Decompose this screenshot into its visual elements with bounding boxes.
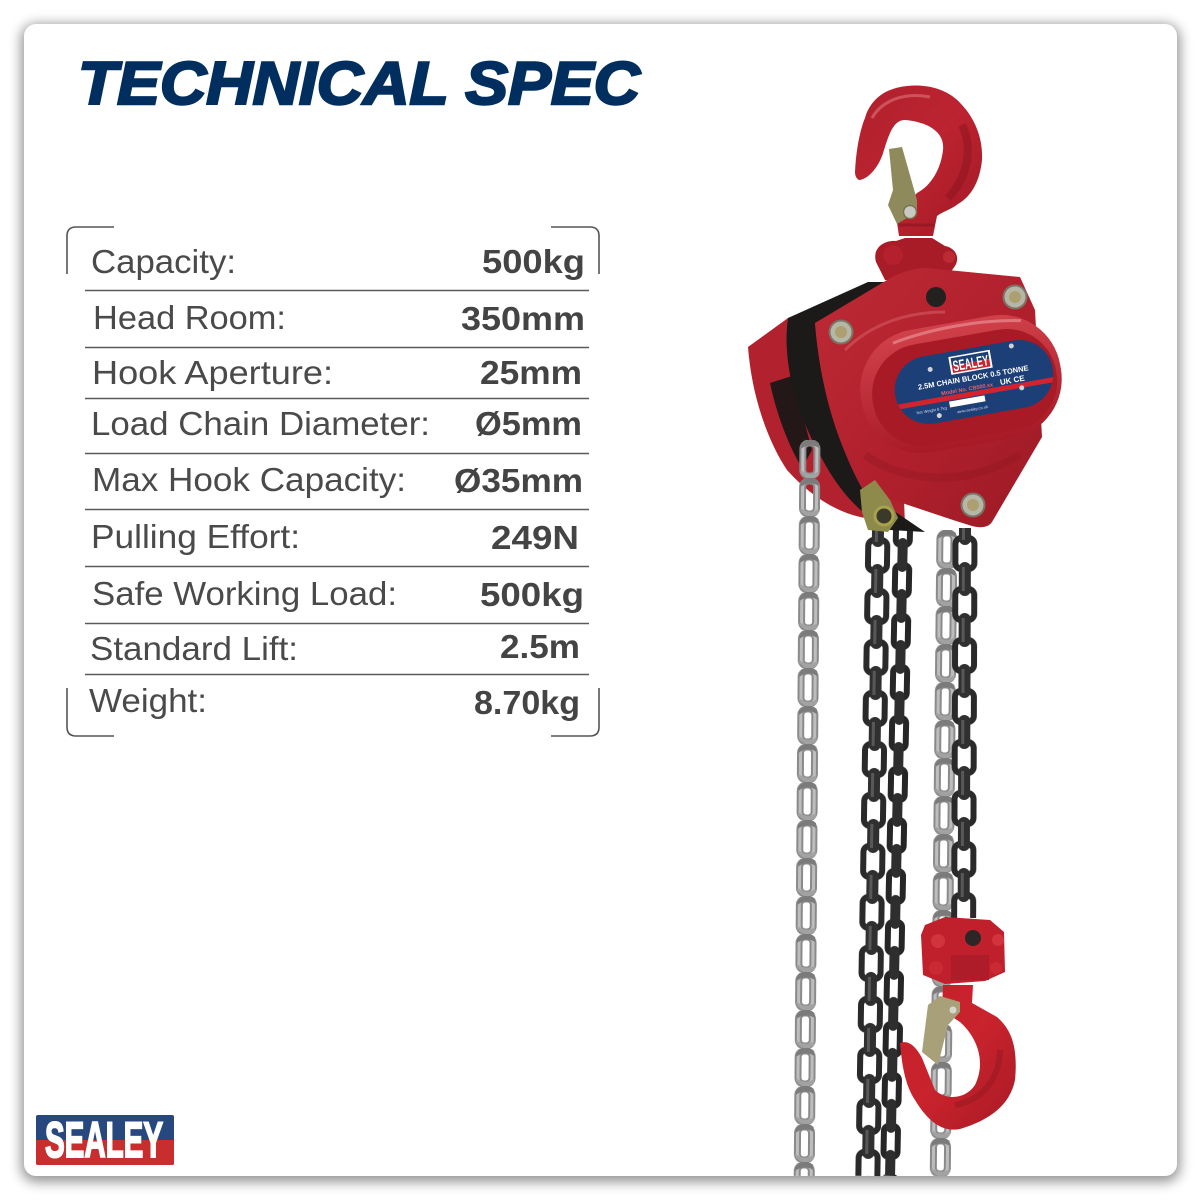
spec labels	[89, 243, 430, 719]
product label plate: Model No. CB500.xx	[941, 382, 995, 397]
panel: specification table	[67, 227, 599, 736]
spec values: 2.5m	[500, 628, 580, 665]
upper hook safety latch	[888, 147, 917, 224]
upper hook	[855, 86, 982, 236]
spec values: 25mm	[480, 354, 582, 391]
table row dividers	[85, 290, 589, 674]
product label plate: UK CE	[999, 374, 1026, 387]
spec values: 249N	[491, 519, 579, 556]
lower hook	[900, 985, 1016, 1130]
spec values: Ø5mm	[475, 405, 582, 442]
spec values: 350mm	[461, 300, 585, 337]
spec labels: Pulling Effort:	[91, 518, 300, 555]
product illustration: chain block hoist	[748, 86, 1071, 1176]
product label plate: SEALEY	[952, 352, 990, 375]
spec labels: Capacity:	[91, 243, 236, 280]
spec values	[454, 243, 585, 721]
title: TECHNICAL SPEC	[78, 50, 642, 117]
lower hook block	[921, 917, 1005, 984]
front housing plate	[815, 268, 1042, 527]
spec values: 500kg	[480, 576, 584, 613]
rear housing plate	[748, 283, 905, 525]
spec labels: Safe Working Load:	[92, 575, 397, 612]
black centre housing	[787, 282, 925, 532]
spec labels: Head Room:	[93, 299, 286, 336]
spec labels: Max Hook Capacity:	[92, 461, 406, 498]
spec labels: Weight:	[89, 682, 207, 719]
table corner brackets	[67, 227, 599, 736]
product label plate: 2.5M CHAIN BLOCK 0.5 TONNE	[917, 363, 1029, 392]
black load chains	[854, 528, 979, 1176]
spec values: Ø35mm	[454, 462, 583, 499]
lower hook safety latch	[922, 996, 960, 1065]
back silver hand chain	[928, 530, 959, 1176]
spec labels: Load Chain Diameter:	[91, 405, 430, 442]
swivel head	[875, 238, 957, 280]
Sealey logo: SEALEY	[45, 1112, 163, 1168]
product label plate: www.sealey.co.uk	[957, 404, 988, 414]
front silver hand chain	[791, 440, 823, 1176]
product label plate: Net Weight 8.7kg	[916, 405, 947, 415]
product label plate	[894, 340, 1054, 424]
spec values: 8.70kg	[474, 684, 580, 721]
spec labels: Standard Lift:	[90, 630, 298, 667]
spec values: 500kg	[482, 243, 585, 280]
Sealey logo	[36, 1112, 174, 1168]
oval raised cover	[851, 305, 1071, 463]
bolts	[830, 286, 1026, 516]
lower chain guide pin	[860, 480, 898, 532]
spec labels: Hook Aperture:	[92, 354, 333, 391]
